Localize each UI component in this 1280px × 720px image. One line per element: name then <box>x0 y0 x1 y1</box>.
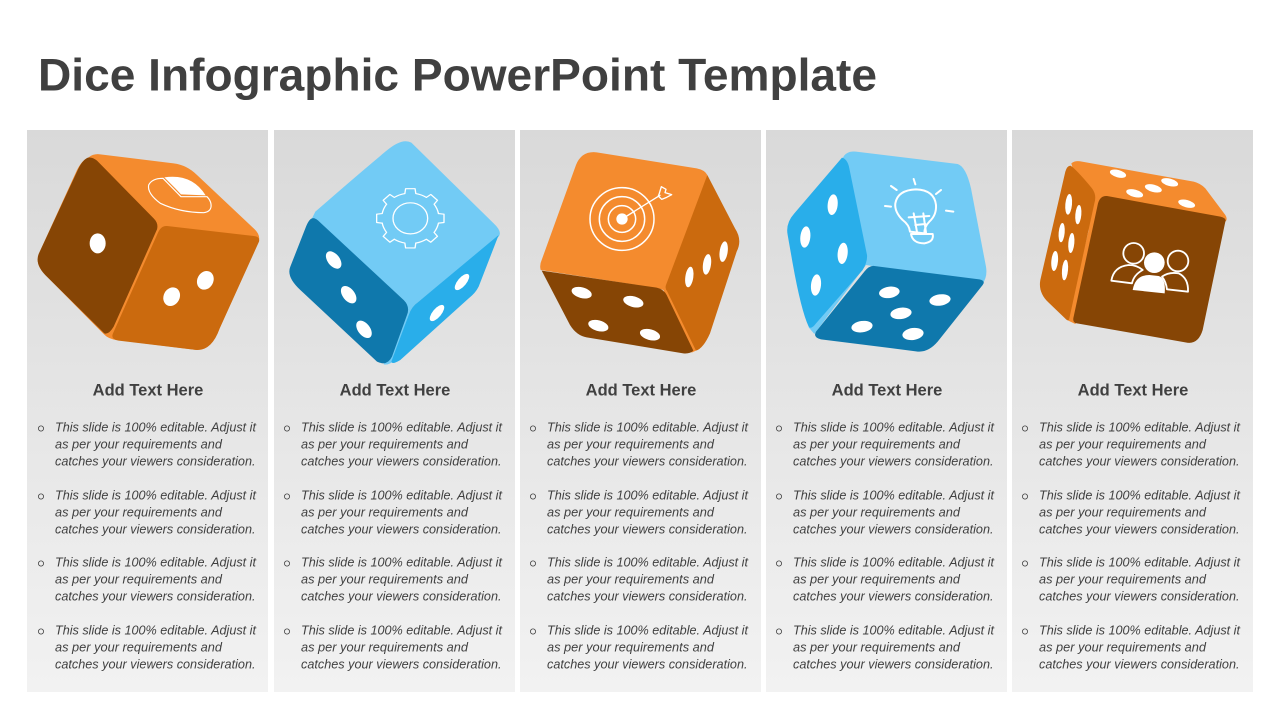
bullet list: catches your viewers consideration. <box>793 588 994 604</box>
bullet list <box>776 420 994 672</box>
panel background <box>766 130 1007 692</box>
bullet list: This slide is 100% editable. Adjust it <box>1039 420 1240 434</box>
icon: people <box>1111 243 1188 293</box>
bullet list: as per your requirements and <box>55 504 223 520</box>
bullet list: catches your viewers consideration. <box>547 588 748 604</box>
bullet list: as per your requirements and <box>1039 504 1207 520</box>
bullet list: as per your requirements and <box>301 572 469 586</box>
bullet list <box>530 420 748 672</box>
bullet list: as per your requirements and <box>793 572 961 586</box>
bullet list: This slide is 100% editable. Adjust it <box>793 488 994 502</box>
die: orange, target icon <box>540 152 739 353</box>
heading: Add Text Here <box>93 382 203 400</box>
bullet list: catches your viewers consideration. <box>793 454 994 468</box>
icon: target with arrow <box>590 187 672 250</box>
bullet list: as per your requirements and <box>793 436 961 452</box>
die: brown front, people icon <box>1040 161 1227 343</box>
bullet list: catches your viewers consideration. <box>547 656 748 672</box>
bullet list: as per your requirements and <box>547 572 715 586</box>
bullet list: catches your viewers consideration. <box>55 522 256 536</box>
bullet list <box>1022 420 1240 672</box>
bullet list: This slide is 100% editable. Adjust it <box>1039 488 1240 502</box>
bullet list: as per your requirements and <box>547 640 715 654</box>
bullet list <box>284 420 502 672</box>
bullet list: as per your requirements and <box>1039 640 1207 654</box>
bullet list: This slide is 100% editable. Adjust it <box>1039 622 1240 638</box>
heading: Add Text Here <box>586 382 696 400</box>
panel background <box>274 130 515 692</box>
bullet list: catches your viewers consideration. <box>1039 454 1240 468</box>
panel background <box>1012 130 1253 692</box>
title: Dice Infographic PowerPoint Template <box>38 50 877 100</box>
bullet list: This slide is 100% editable. Adjust it <box>793 420 994 434</box>
bullet list: catches your viewers consideration. <box>547 522 748 536</box>
bullet list: This slide is 100% editable. Adjust it <box>547 420 748 434</box>
bullet list: This slide is 100% editable. Adjust it <box>547 554 748 570</box>
bullet list: catches your viewers consideration. <box>55 656 256 672</box>
bullet list: catches your viewers consideration. <box>301 522 502 536</box>
die: blue, gear icon <box>289 141 500 365</box>
bullet list: catches your viewers consideration. <box>547 454 748 468</box>
bullet list: as per your requirements and <box>793 504 961 520</box>
bullet list: This slide is 100% editable. Adjust it <box>301 420 502 434</box>
die: blue, light bulb icon <box>787 152 986 352</box>
bullet list: catches your viewers consideration. <box>55 454 256 468</box>
heading: Add Text Here <box>1078 382 1188 400</box>
bullet list: as per your requirements and <box>1039 436 1207 452</box>
bullet list: This slide is 100% editable. Adjust it <box>55 488 256 502</box>
bullet list: as per your requirements and <box>55 572 223 586</box>
bullet list: This slide is 100% editable. Adjust it <box>1039 554 1240 570</box>
bullet list: as per your requirements and <box>1039 572 1207 586</box>
die: orange, pie chart icon <box>38 154 259 350</box>
bullet list: as per your requirements and <box>301 436 469 452</box>
bullet list: catches your viewers consideration. <box>55 588 256 604</box>
bullet list: as per your requirements and <box>55 436 223 452</box>
bullet list: This slide is 100% editable. Adjust it <box>55 554 256 570</box>
bullet list: as per your requirements and <box>547 504 715 520</box>
bullet list: as per your requirements and <box>55 640 223 654</box>
panel: die four <box>766 130 1007 692</box>
bullet list: This slide is 100% editable. Adjust it <box>55 420 256 434</box>
bullet list: This slide is 100% editable. Adjust it <box>793 554 994 570</box>
bullet list: This slide is 100% editable. Adjust it <box>547 488 748 502</box>
bullet list <box>38 420 256 672</box>
panel: die two <box>274 130 515 692</box>
bullet list: as per your requirements and <box>793 640 961 654</box>
bullet list: This slide is 100% editable. Adjust it <box>301 554 502 570</box>
heading: Add Text Here <box>340 382 450 400</box>
icon: light bulb <box>885 179 953 243</box>
bullet list: This slide is 100% editable. Adjust it <box>547 622 748 638</box>
bullet list: catches your viewers consideration. <box>793 522 994 536</box>
bullet list: as per your requirements and <box>547 436 715 452</box>
bullet list: as per your requirements and <box>301 640 469 654</box>
bullet list: catches your viewers consideration. <box>1039 522 1240 536</box>
heading: Add Text Here <box>832 382 942 400</box>
bullet list: catches your viewers consideration. <box>793 656 994 672</box>
bullet list: catches your viewers consideration. <box>301 454 502 468</box>
icon: pie chart <box>148 177 211 213</box>
bullet list: This slide is 100% editable. Adjust it <box>301 622 502 638</box>
bullet list: This slide is 100% editable. Adjust it <box>793 622 994 638</box>
panel background <box>520 130 761 692</box>
bullet list: This slide is 100% editable. Adjust it <box>55 622 256 638</box>
bullet list: catches your viewers consideration. <box>301 656 502 672</box>
panel: die one <box>27 130 268 692</box>
panel: die three <box>520 130 761 692</box>
icon: gear <box>375 187 445 249</box>
panel background <box>27 130 268 692</box>
bullet list: as per your requirements and <box>301 504 469 520</box>
bullet list: catches your viewers consideration. <box>1039 656 1240 672</box>
bullet list: catches your viewers consideration. <box>301 588 502 604</box>
bullet list: This slide is 100% editable. Adjust it <box>301 488 502 502</box>
panel: die five <box>1012 130 1253 692</box>
bullet list: catches your viewers consideration. <box>1039 588 1240 604</box>
